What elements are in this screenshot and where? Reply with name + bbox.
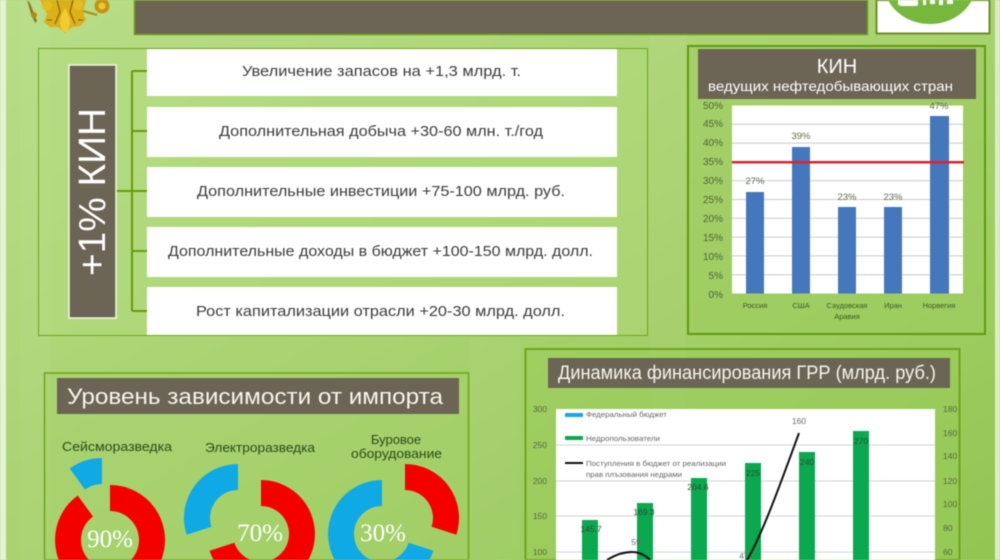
row: reserves: Увеличение запасов на +1,3 млрд. т. <box>242 63 521 80</box>
combo chart: funding bars and revenue line: 140 <box>943 451 957 461</box>
combo chart: funding bars and revenue line: 160 <box>943 428 957 438</box>
bar chart: KIN by country: 47% <box>929 101 949 112</box>
bar chart: KIN by country: США <box>792 301 810 310</box>
row: investment <box>147 167 617 217</box>
donut: seismic exploration: 90% <box>87 526 133 553</box>
logo box <box>876 0 990 34</box>
donut: electrical exploration: Электроразведка <box>205 440 316 455</box>
bar chart: KIN by country: 45% <box>703 119 723 130</box>
bar chart: KIN by country: 25% <box>703 195 723 206</box>
funding heading <box>548 358 950 388</box>
combo chart: funding bars and revenue line <box>533 404 957 560</box>
combo chart: funding bars and revenue line: 150 <box>533 511 547 521</box>
bar chart: KIN by country <box>703 101 964 321</box>
row: reserves <box>147 49 617 96</box>
emblem: double-headed eagle <box>27 0 110 33</box>
vertical label: +1% KIN <box>69 65 116 318</box>
bar chart: KIN by country: 5% <box>709 271 723 282</box>
combo chart: funding bars and revenue line: 250 <box>533 440 547 450</box>
row: budget revenue: Дополнительные доходы в бюджет +100-150 млрд. долл. <box>168 243 593 260</box>
KIN heading: ведущих нефтедобывающих стран <box>708 78 953 94</box>
bar chart: KIN by country: 39% <box>791 131 811 142</box>
legend: Недропользователи <box>586 434 660 443</box>
donut: electrical exploration: 70% <box>237 520 283 547</box>
funding heading: Динамика финансирования ГРР (млрд. руб.) <box>558 363 936 384</box>
row: capitalization: Рост капитализации отрасли +20-30 млрд. долл. <box>196 303 565 320</box>
revenue line <box>607 433 799 560</box>
bar chart: KIN by country: Аравия <box>834 312 860 321</box>
bar chart: KIN by country: 35% <box>703 157 723 168</box>
connector lines <box>116 71 147 311</box>
bar chart: KIN by country: 50% <box>703 101 723 112</box>
row: production: Дополнительная добыча +30-60 млн. т./год <box>219 123 543 140</box>
legend: Поступления в бюджет от реализации <box>586 459 726 468</box>
bar chart: KIN by country: Россия <box>743 301 767 310</box>
import heading: Уровень зависимости от импорта <box>67 384 444 409</box>
bar chart: KIN by country: 27% <box>745 176 765 187</box>
combo chart: funding bars and revenue line: 100 <box>943 499 957 509</box>
KIN heading <box>698 49 976 99</box>
combo chart: funding bars and revenue line: 60 <box>943 547 953 557</box>
bar chart: KIN by country: Иран <box>884 301 902 310</box>
bar chart: KIN by country: 10% <box>703 252 723 263</box>
bar chart: KIN by country: 30% <box>703 176 723 187</box>
legend: прав плъзования недрами <box>586 470 682 479</box>
bar chart: KIN by country: 20% <box>703 214 723 225</box>
combo chart: funding bars and revenue line: 100 <box>533 547 547 557</box>
combo chart: funding bars and revenue line: 225 <box>746 468 760 478</box>
row: capitalization <box>147 287 617 335</box>
combo chart: funding bars and revenue line: 160 <box>792 416 806 426</box>
combo chart: funding bars and revenue line: 180 <box>943 404 957 414</box>
combo chart: funding bars and revenue line: 240 <box>800 457 814 467</box>
header banner <box>134 0 868 34</box>
donut: drilling equipment: оборудование <box>351 446 442 461</box>
combo chart: funding bars and revenue line: 120 <box>943 476 957 486</box>
combo chart: funding bars and revenue line: 80 <box>943 523 953 533</box>
donut: seismic exploration: Сейсморазведка <box>62 439 173 454</box>
bar chart: KIN by country: 40% <box>703 138 723 149</box>
panel: effect of +1% KIN <box>38 48 648 336</box>
combo chart: funding bars and revenue line: 300 <box>533 404 547 414</box>
combo chart: funding bars and revenue line: 204.6 <box>687 482 709 492</box>
bar chart: KIN by country: 0% <box>709 290 723 301</box>
panel: exploration funding <box>526 349 960 560</box>
combo chart: funding bars and revenue line: 200 <box>533 476 547 486</box>
vertical label: +1% KIN: +1% КИН <box>72 108 114 276</box>
row: investment: Дополнительные инвестиции +75-100 млрд. руб. <box>197 183 565 200</box>
bar chart: KIN by country: 15% <box>703 233 723 244</box>
combo chart: funding bars and revenue line: 169.3 <box>633 507 655 517</box>
bar chart: KIN by country: Норвегия <box>923 301 955 310</box>
donut: drilling equipment: 30% <box>360 520 406 547</box>
import heading <box>57 378 459 414</box>
legend <box>565 410 726 479</box>
donut: electrical exploration <box>184 440 316 560</box>
combo chart: funding bars and revenue line: 59 <box>631 537 641 547</box>
donut: drilling equipment: Буровое <box>371 432 421 447</box>
bar chart: KIN by country: Саудовская <box>827 301 867 310</box>
KIN heading: КИН <box>817 56 857 78</box>
row: production <box>147 107 617 157</box>
donut: seismic exploration <box>55 439 173 560</box>
legend: Федеральный бюджет <box>586 410 668 419</box>
panel: import dependency <box>44 373 468 560</box>
panel: KIN of leading countries <box>688 46 985 334</box>
combo chart: funding bars and revenue line: 270 <box>854 436 868 446</box>
combo chart: funding bars and revenue line: 145.7 <box>580 524 602 534</box>
donut: drilling equipment <box>328 432 459 560</box>
row: budget revenue <box>147 227 617 277</box>
bar chart: KIN by country: 23% <box>883 192 903 203</box>
bar chart: KIN by country: 23% <box>837 192 857 203</box>
